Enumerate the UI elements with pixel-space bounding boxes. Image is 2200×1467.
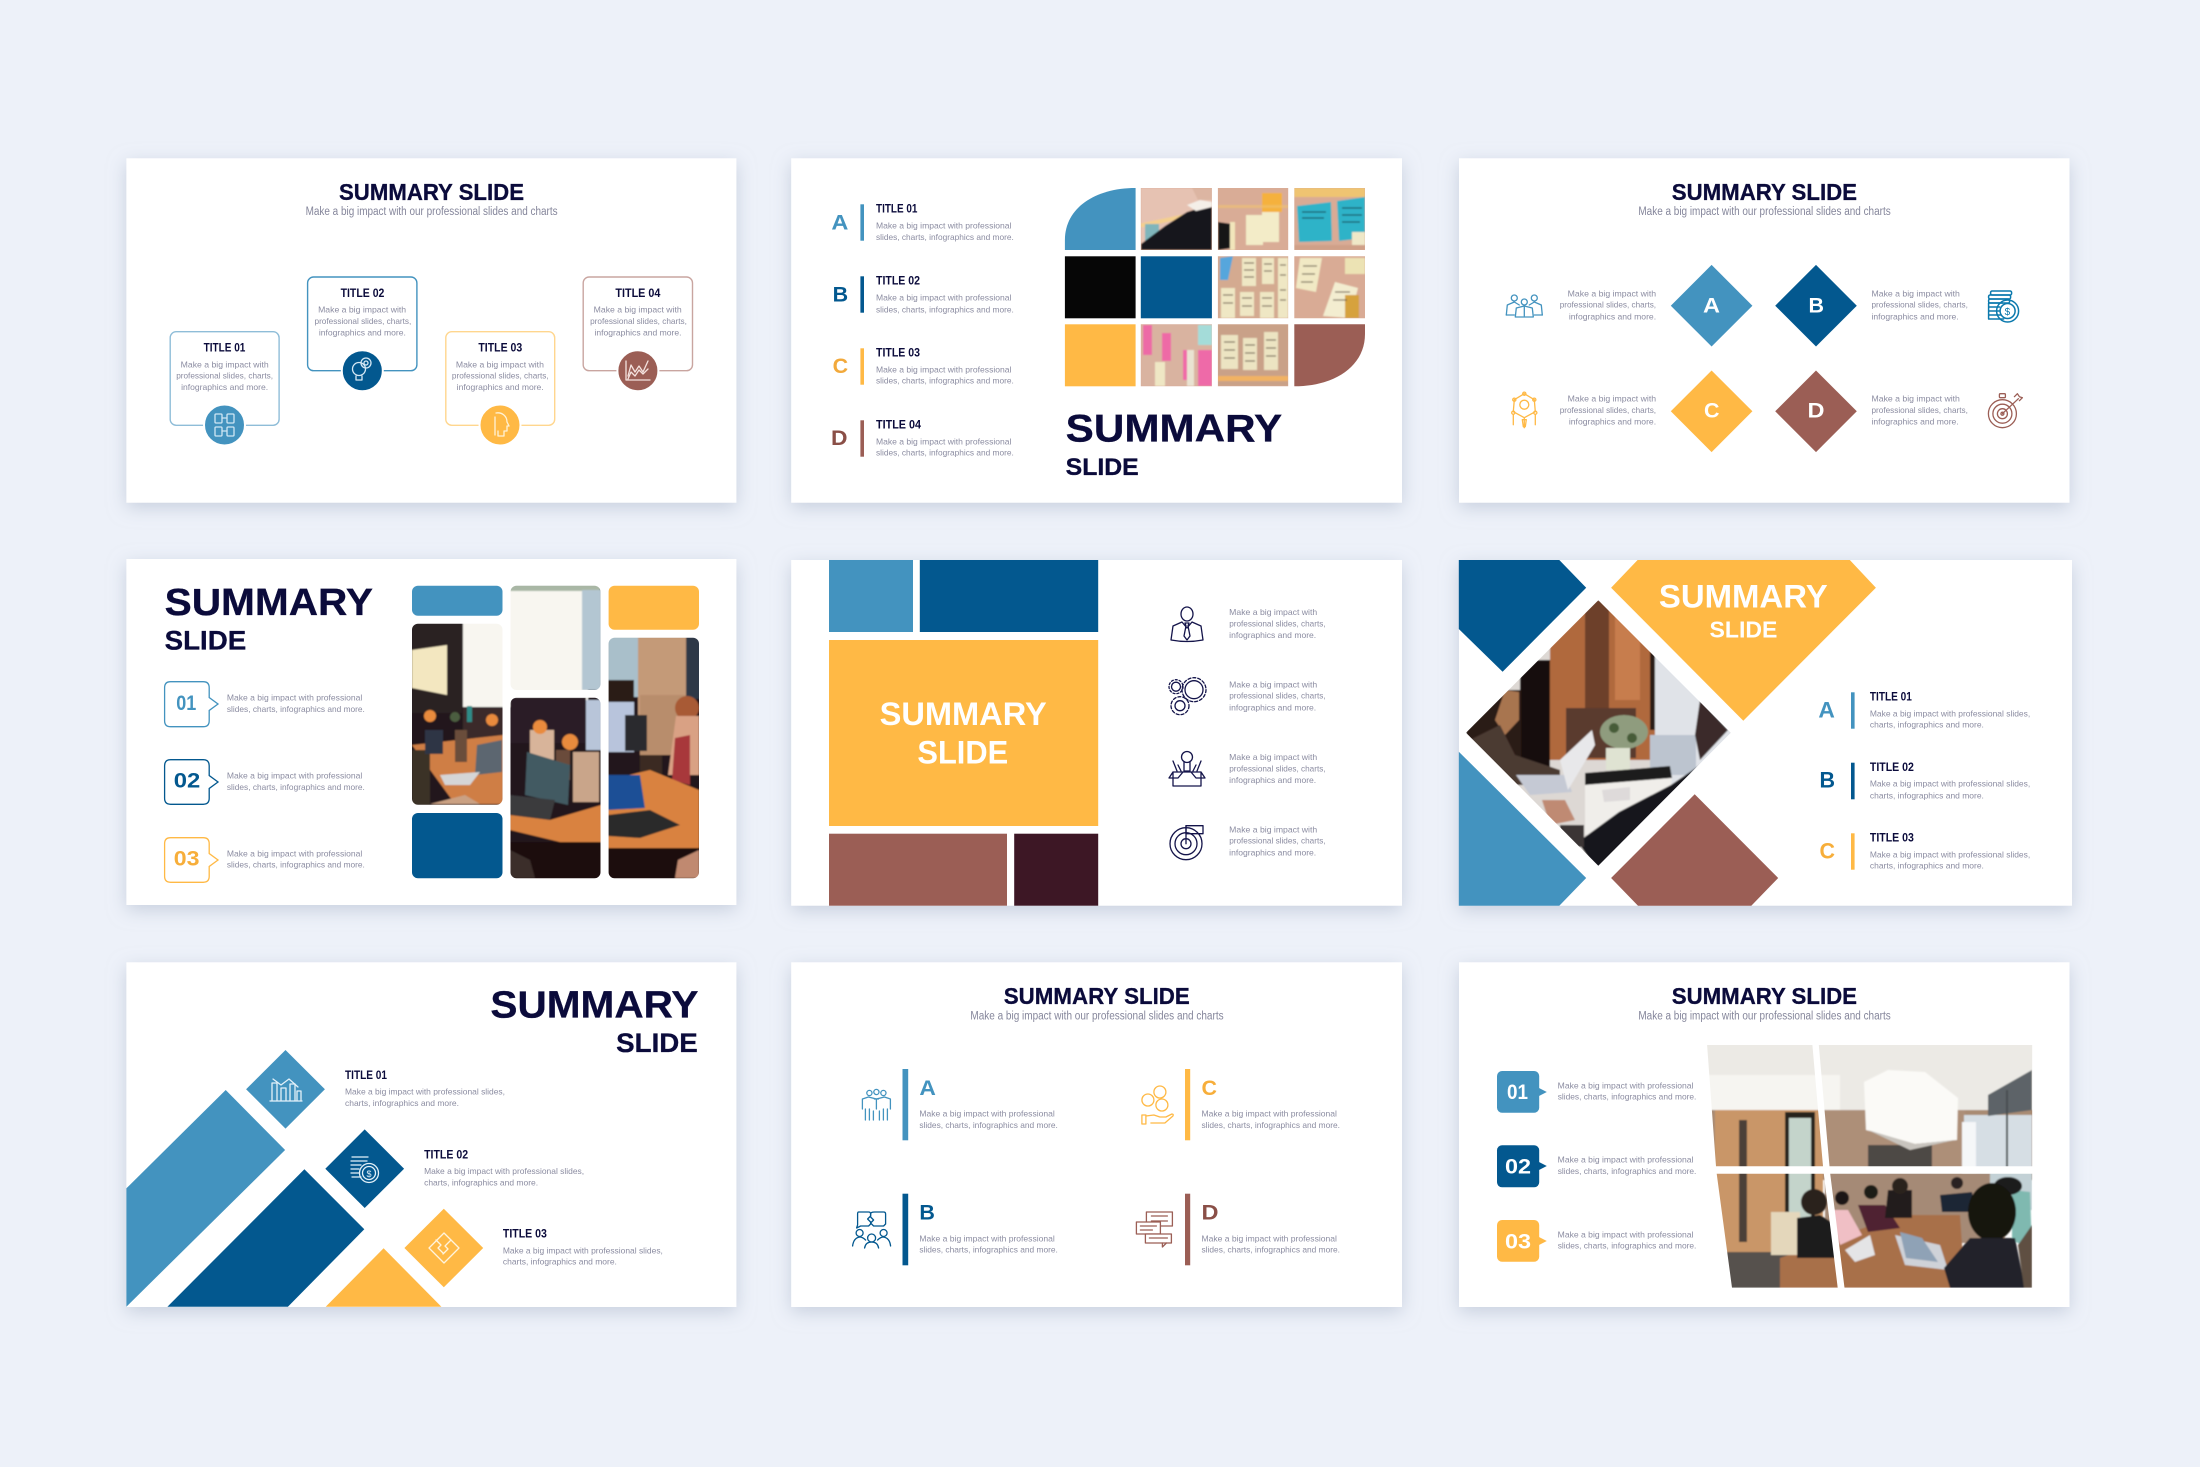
diamond D: D <box>1808 400 1824 422</box>
photo: team at laptops <box>1460 595 1740 872</box>
item B <box>853 1194 1058 1265</box>
color tiles <box>412 586 699 878</box>
icon: coins: $ <box>2005 307 2011 318</box>
sub heading: SLIDE <box>165 625 246 655</box>
card 3: infographics and more. <box>457 382 544 392</box>
card 2 <box>308 277 417 391</box>
text block B: Make a big impact with <box>1872 288 1960 298</box>
card 3: professional slides, charts, <box>452 371 549 381</box>
item 02 <box>1497 1145 1696 1187</box>
item D: slides, charts, infographics and more. <box>1202 1245 1340 1255</box>
item 01: slides, charts, infographics and more. <box>1558 1092 1696 1102</box>
item 01: Make a big impact with professional <box>1558 1080 1694 1090</box>
icon: team <box>1506 295 1542 317</box>
heading: SUMMARY SLIDE <box>1672 179 1857 205</box>
text block C: Make a big impact with <box>1568 394 1656 404</box>
item 02 <box>165 760 365 804</box>
text block C: professional slides, charts, <box>1560 405 1656 415</box>
diagonal bands <box>126 1090 441 1307</box>
yellow heading shape: SLIDE <box>1710 617 1777 643</box>
text blocks: professional slides, charts, <box>1229 836 1326 846</box>
yellow heading block: SLIDE <box>917 734 1008 770</box>
card 3: Make a big impact with <box>456 359 544 369</box>
diamond B <box>1775 265 1857 346</box>
card 4: Make a big impact with <box>594 305 682 315</box>
item A: A <box>919 1076 936 1100</box>
list item C: charts, infographics and more. <box>1870 861 1984 871</box>
item C: C <box>1202 1076 1217 1100</box>
item 03: slides, charts, infographics and more. <box>1558 1241 1696 1251</box>
list item B: TITLE 02 <box>1870 762 1914 774</box>
card 2: professional slides, charts, <box>314 316 411 326</box>
text blocks: Make a big impact with <box>1229 824 1318 834</box>
text block B: infographics and more. <box>1872 311 1959 321</box>
text blocks: infographics and more. <box>1229 775 1316 785</box>
panel: slide 1 title cards <box>126 158 736 503</box>
item 01: 01 <box>1507 1081 1528 1104</box>
list item A: Make a big impact with professional slides, <box>1870 708 2030 718</box>
photo: sticky notes wall <box>1140 188 1365 386</box>
yellow heading block: SUMMARY <box>880 696 1047 732</box>
icon: org leader <box>1512 392 1537 428</box>
panel: slide 9 photo with numbered list <box>1459 962 2070 1307</box>
item 2: $ <box>366 1169 372 1179</box>
item 03: Make a big impact with professional <box>1558 1229 1694 1239</box>
list item A: A <box>831 210 848 234</box>
card 3: TITLE 03 <box>478 343 522 355</box>
list item A <box>831 204 1014 242</box>
card 1 <box>170 332 279 446</box>
list item B <box>1820 762 2030 800</box>
text block B: professional slides, charts, <box>1872 300 1968 310</box>
list item B <box>833 276 1014 314</box>
panel: slide 6 diamond collage <box>1459 560 2072 906</box>
card 2: TITLE 02 <box>341 288 384 300</box>
item 3 <box>404 1209 663 1287</box>
item 03 <box>165 838 365 882</box>
card 4: TITLE 04 <box>615 288 661 300</box>
icon: gears <box>1169 678 1206 715</box>
panel: slide 5 color blocks <box>791 560 1402 906</box>
text block C: infographics and more. <box>1569 417 1656 427</box>
heading: SUMMARY SLIDE <box>1672 983 1857 1009</box>
list item D: TITLE 04 <box>876 419 922 431</box>
list item A <box>1818 691 2030 730</box>
item C: slides, charts, infographics and more. <box>1202 1120 1340 1130</box>
text block B <box>1872 288 1968 321</box>
yellow heading block <box>829 640 1098 826</box>
item 01: Make a big impact with professional <box>227 693 362 703</box>
list item B: B <box>1820 768 1835 793</box>
list item A: TITLE 01 <box>1870 691 1912 703</box>
list item D: D <box>831 426 848 450</box>
icon: businessman <box>1171 607 1203 642</box>
diamond A: A <box>1703 294 1720 317</box>
text blocks: professional slides, charts, <box>1229 763 1326 773</box>
subtitle: Make a big impact with our professional slides and charts <box>1638 1010 1891 1022</box>
text block D: infographics and more. <box>1872 417 1959 427</box>
list item B: TITLE 02 <box>876 276 920 288</box>
color tiles <box>1065 188 1365 386</box>
item B: slides, charts, infographics and more. <box>919 1245 1058 1255</box>
photo: meeting room <box>405 580 705 885</box>
list item D <box>831 419 1014 458</box>
subtitle: Make a big impact with our professional slides and charts <box>970 1010 1224 1022</box>
item 2: charts, infographics and more. <box>424 1177 538 1187</box>
panel: slide 3 diamonds <box>1459 158 2070 503</box>
item 3: Make a big impact with professional slides, <box>503 1245 663 1255</box>
text blocks: infographics and more. <box>1229 702 1316 712</box>
panel: slide 7 diagonal bands <box>126 962 736 1307</box>
item 02: slides, charts, infographics and more. <box>1558 1166 1696 1176</box>
item 1: TITLE 01 <box>345 1070 388 1082</box>
item 02: Make a big impact with professional <box>1558 1155 1694 1165</box>
text block D: professional slides, charts, <box>1872 405 1968 415</box>
item C: Make a big impact with professional <box>1202 1109 1337 1119</box>
item D: D <box>1202 1201 1218 1225</box>
item D: Make a big impact with professional <box>1202 1233 1337 1243</box>
list item A: Make a big impact with professional <box>876 221 1012 231</box>
sub heading: SLIDE <box>1066 454 1139 481</box>
list item B: B <box>833 282 848 306</box>
text blocks: professional slides, charts, <box>1229 618 1326 628</box>
item 02: 02 <box>1505 1156 1531 1179</box>
big heading: SUMMARY <box>1066 408 1282 451</box>
list item B: charts, infographics and more. <box>1870 790 1984 800</box>
list item C: Make a big impact with professional slides, <box>1870 849 2030 859</box>
sub heading: SLIDE <box>616 1028 698 1058</box>
list item A: charts, infographics and more. <box>1870 720 1984 730</box>
card 1: infographics and more. <box>181 382 268 392</box>
icon: idea box <box>1169 752 1205 786</box>
item 01 <box>1497 1071 1696 1113</box>
text blocks: Make a big impact with <box>1229 752 1318 762</box>
panel: slide 4 numbered list with photo columns <box>126 559 736 905</box>
item 1: Make a big impact with professional slides, <box>345 1087 505 1097</box>
panel: slide 8 four items <box>791 962 1402 1307</box>
card 4: professional slides, charts, <box>590 316 687 326</box>
card 2: Make a big impact with <box>318 305 406 315</box>
subtitle: Make a big impact with our professional slides and charts <box>306 206 558 218</box>
big heading: SUMMARY <box>490 985 698 1027</box>
item 2: Make a big impact with professional slides, <box>424 1166 584 1176</box>
item A: slides, charts, infographics and more. <box>919 1120 1058 1130</box>
text block A: infographics and more. <box>1569 311 1656 321</box>
item 2: TITLE 02 <box>424 1149 468 1161</box>
list item D: Make a big impact with professional <box>876 436 1012 446</box>
list item C <box>1820 832 2030 871</box>
list item C <box>833 347 1014 386</box>
item 03: 03 <box>174 848 200 871</box>
text blocks: infographics and more. <box>1229 630 1316 640</box>
panel: slide 2 photo grid <box>791 158 1402 503</box>
item 03: slides, charts, infographics and more. <box>227 860 365 870</box>
item 1 <box>246 1050 505 1129</box>
item 02: 02 <box>174 770 200 793</box>
list item C: TITLE 03 <box>876 347 920 359</box>
item 02: slides, charts, infographics and more. <box>227 782 365 792</box>
item 02: Make a big impact with professional <box>227 771 362 781</box>
item D <box>1136 1194 1340 1265</box>
yellow heading shape: SUMMARY <box>1659 578 1828 614</box>
card 3 <box>446 332 555 446</box>
text blocks: Make a big impact with <box>1229 679 1318 689</box>
card 1: Make a big impact with <box>181 359 269 369</box>
item A <box>862 1069 1058 1140</box>
list item B: Make a big impact with professional <box>876 293 1012 303</box>
diamond C: C <box>1704 400 1720 422</box>
item 1: charts, infographics and more. <box>345 1098 459 1108</box>
card 4: infographics and more. <box>594 328 682 338</box>
item 03 <box>1497 1220 1696 1262</box>
card 4 <box>583 277 692 391</box>
icon: target stopwatch <box>1988 394 2022 428</box>
card 1: TITLE 01 <box>204 343 246 355</box>
item 03: Make a big impact with professional <box>227 848 362 858</box>
text blocks <box>1229 607 1326 857</box>
subtitle: Make a big impact with our professional slides and charts <box>1638 206 1891 218</box>
item C <box>1142 1069 1340 1140</box>
list item B: Make a big impact with professional slides, <box>1870 779 2030 789</box>
heading: SUMMARY SLIDE <box>1004 983 1190 1009</box>
list item C: C <box>833 354 848 378</box>
list item B: slides, charts, infographics and more. <box>876 304 1014 314</box>
list item A: A <box>1818 697 1835 722</box>
card 2: infographics and more. <box>319 328 406 338</box>
text block D: Make a big impact with <box>1872 394 1960 404</box>
list item D: slides, charts, infographics and more. <box>876 448 1014 458</box>
list item C: Make a big impact with professional <box>876 364 1012 374</box>
card 1: professional slides, charts, <box>176 371 273 381</box>
text block A: professional slides, charts, <box>1560 300 1656 310</box>
diamond C <box>1671 370 1752 452</box>
yellow heading shape <box>1611 560 1876 721</box>
text blocks: Make a big impact with <box>1229 607 1318 617</box>
item B: B <box>919 1201 935 1225</box>
icon: target flag <box>1170 826 1203 860</box>
item 2 <box>325 1129 584 1208</box>
item 3: TITLE 03 <box>503 1229 547 1241</box>
big heading: SUMMARY <box>165 582 373 624</box>
item B: Make a big impact with professional <box>919 1233 1055 1243</box>
text blocks: infographics and more. <box>1229 847 1316 857</box>
item 01: 01 <box>176 692 196 715</box>
diamond A <box>1671 265 1752 346</box>
item 01: slides, charts, infographics and more. <box>227 704 365 714</box>
list item C: C <box>1820 838 1835 863</box>
text block A <box>1560 288 1656 321</box>
diamond B: B <box>1808 294 1824 317</box>
item A: Make a big impact with professional <box>919 1109 1055 1119</box>
text block A: Make a big impact with <box>1568 288 1656 298</box>
icon: coins <box>1989 291 2019 322</box>
item 01 <box>165 682 365 727</box>
color blocks <box>829 560 1098 906</box>
text blocks: professional slides, charts, <box>1229 691 1326 701</box>
diamond D <box>1775 370 1857 452</box>
list item A: slides, charts, infographics and more. <box>876 232 1014 242</box>
shapes <box>1459 560 1778 906</box>
list item C: TITLE 03 <box>1870 832 1914 844</box>
item 03: 03 <box>1505 1230 1531 1253</box>
list item A: TITLE 01 <box>876 204 918 216</box>
heading: SUMMARY SLIDE <box>339 179 524 205</box>
text block C <box>1560 394 1656 427</box>
item 3: charts, infographics and more. <box>503 1257 617 1267</box>
photo: conference room <box>1700 1040 2040 1288</box>
list item C: slides, charts, infographics and more. <box>876 376 1014 386</box>
text block D <box>1872 394 1968 427</box>
